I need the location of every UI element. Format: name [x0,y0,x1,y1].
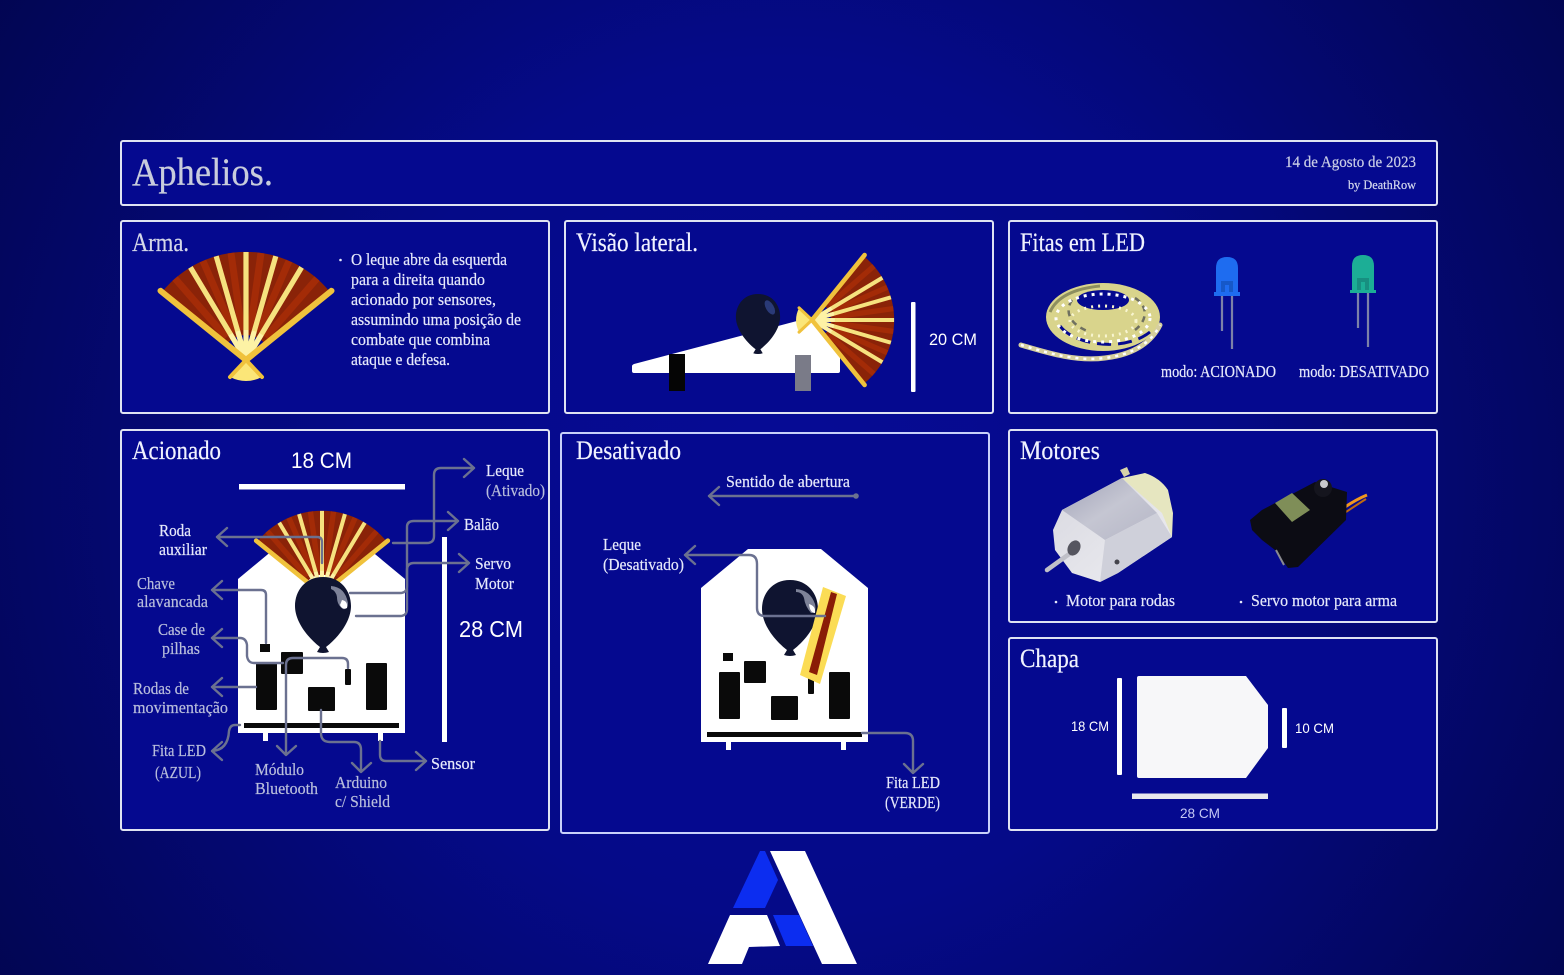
logo: A mark [708,851,857,964]
label: Fita LED Verde [885,773,940,812]
icon: servo motor [1250,479,1367,568]
callout arrows [685,546,923,773]
text block: fan description: O leque abre da esquerda [351,250,508,269]
panel: Desativado [561,433,989,833]
panel: Acionado [121,430,549,830]
panel: title bar [121,141,1437,205]
icon: DC motor [1047,467,1173,582]
heading: Motores: Motores [1020,436,1100,465]
labels: left components: Rodas de [133,679,189,698]
panel: Chapa [1009,638,1437,830]
labels: left components: Case de [158,620,205,639]
text block: fan description: para a direita quando [351,270,485,289]
labels: right components: Balão [464,515,499,534]
icon: open fan [160,252,332,381]
label: Fita LED Verde: Fita LED [886,773,940,792]
dimension: 28 CM: 28 CM [1180,805,1220,821]
label: Leque Desativado: (Desativado) [603,555,684,574]
heading: Acionado: Acionado [132,436,221,465]
label: Leque Desativado: Leque [603,535,641,554]
heading: Fitas em LED: Fitas em LED [1020,228,1145,257]
dimension: 20 CM: 20 CM [929,330,977,349]
labels: left components [133,521,228,782]
text block: fan description: ataque e defesa. [351,350,450,369]
date: 14 de Agosto de 2023 [1285,154,1416,171]
labels: left components: auxiliar [159,540,207,559]
icon: balloon [295,577,351,653]
icon: closed fan [800,587,846,684]
icon: open fan [256,511,388,594]
dimension: 18 CM [1071,678,1122,775]
dimension: 18 CM: 18 CM [291,448,352,473]
dimension: 18 CM [239,448,405,490]
front wheel [669,354,685,391]
dimension: 10 CM: 10 CM [1295,720,1334,736]
list item: Servo motor para arma: Servo motor para arma [1251,591,1398,610]
plate shape [1137,676,1268,778]
labels: right components: Motor [475,574,514,593]
labels: left components: Chave [137,574,175,593]
dimension: 10 CM [1282,708,1334,748]
text block: fan description: acionado por sensores, [351,290,496,309]
labels: bottom components: c/ Shield [335,792,391,811]
label: modo acionado: modo: ACIONADO [1161,362,1276,381]
labels: right components [464,461,545,593]
car top view [238,540,405,741]
panel: Fitas em LED [1009,221,1437,413]
icon: balloon [762,580,818,656]
label: Fita LED Verde: (VERDE) [885,793,940,812]
heading: Chapa: Chapa [1020,644,1079,673]
labels: right components: (Ativado) [486,481,545,500]
labels: left components: alavancada [137,592,209,611]
panel: Motores [1009,430,1437,622]
icon: blue LED [1214,257,1240,349]
labels: left components: pilhas [162,639,200,658]
icon: LED strip roll [1021,283,1160,359]
labels: bottom components: Arduino [335,773,387,792]
text block: fan description [339,250,521,369]
author: by DeathRow [1348,177,1417,192]
panel: Visão lateral [565,221,993,413]
callout arrows [212,459,474,772]
labels: left components: (AZUL) [155,763,201,782]
dimension: 28 CM: 28 CM [459,616,523,642]
title: Aphelios. [132,151,273,194]
labels: left components: Roda [159,521,192,540]
icon: balloon [736,294,780,354]
dimension: 28 CM [442,537,523,742]
list item: Motor para rodas: Motor para rodas [1066,591,1175,610]
side view chassis [632,317,840,373]
icon: green LED [1350,255,1376,347]
label: Sentido de abertura: Sentido de abertura [726,472,851,491]
labels: left components: Fita LED [152,741,206,760]
car top view [701,549,868,750]
text block: fan description: combate que combina [351,330,491,349]
labels: bottom components: Sensor [431,754,475,773]
rear sensor [795,355,811,391]
labels: bottom components [255,754,475,811]
dimension: 20 CM [911,302,977,392]
labels: right components: Leque [486,461,524,480]
arrow: opening direction [709,487,859,505]
dimension: 18 CM: 18 CM [1071,718,1109,734]
text block: fan description: assumindo uma posição de [351,310,521,329]
labels: bottom components: Módulo [255,760,304,779]
heading: Visão lateral: Visão lateral. [576,228,698,257]
labels: bottom components: Bluetooth [255,779,319,798]
labels: right components: Servo [475,554,511,573]
heading: Desativado: Desativado [576,436,681,465]
panel: Arma [121,221,549,413]
icon: fan rotated [796,255,894,385]
heading: Arma: Arma. [132,228,189,257]
label: modo desativado: modo: DESATIVADO [1299,362,1429,381]
dimension: 28 CM [1132,794,1268,821]
labels: left components: movimentação [133,698,228,717]
label: Leque Desativado [603,535,684,574]
